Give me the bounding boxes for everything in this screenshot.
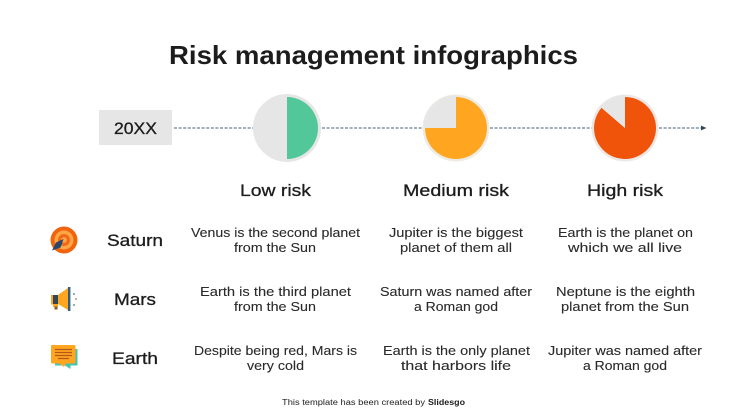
- text: Mars medium risk: [380, 285, 532, 314]
- text: Mars high risk: planet from the Sun: [561, 300, 689, 314]
- text: Saturn low risk: [191, 226, 361, 255]
- icon: megaphone: [51, 287, 77, 311]
- text: Saturn low risk: Venus is the second planet: [191, 226, 361, 240]
- text: Earth high risk: [548, 344, 702, 373]
- text: Earth high risk: a Roman god: [583, 359, 667, 373]
- text: Saturn medium risk: planet of them all: [400, 241, 512, 255]
- footer credit: Slidesgo: [428, 398, 465, 407]
- footer credit: This template has been created by: [282, 398, 425, 407]
- text: Saturn high risk: which we all live: [567, 241, 682, 255]
- text: Mars medium risk: a Roman god: [414, 300, 498, 314]
- pie: low risk: [253, 94, 321, 162]
- text: Saturn high risk: Earth is the planet on: [558, 226, 693, 240]
- icon: chat bubble: [51, 345, 78, 369]
- column heading: medium risk: Medium risk: [403, 181, 510, 200]
- text: Earth medium risk: [383, 344, 531, 373]
- pie: medium risk: [422, 94, 490, 162]
- text: Earth high risk: Jupiter was named after: [548, 344, 702, 358]
- text: Saturn high risk: [558, 226, 693, 255]
- timeline dashed arrow: [174, 126, 706, 130]
- pie: high risk: [592, 94, 658, 162]
- text: Earth low risk: very cold: [247, 359, 304, 373]
- title: Risk management infographics: [169, 40, 578, 70]
- column heading: low risk: Low risk: [240, 181, 312, 200]
- row label: Saturn: Saturn: [107, 231, 163, 250]
- text: Mars high risk: Neptune is the eighth: [556, 285, 695, 299]
- text: Earth medium risk: Earth is the only planet: [383, 344, 531, 358]
- column heading: high risk: High risk: [587, 181, 664, 200]
- text: Mars low risk: from the Sun: [234, 300, 316, 314]
- icon: target: [50, 226, 78, 254]
- text: Mars medium risk: Saturn was named after: [380, 285, 532, 299]
- text: Mars low risk: [200, 285, 352, 314]
- text: Earth medium risk: that harbors life: [401, 359, 511, 373]
- row label: Mars: Mars: [114, 290, 156, 309]
- year label box: [99, 110, 172, 145]
- text: Saturn medium risk: Jupiter is the biggest: [389, 226, 524, 240]
- text: Earth low risk: [194, 344, 357, 373]
- year label box: 20XX: [114, 119, 157, 138]
- text: Mars low risk: Earth is the third planet: [200, 285, 352, 299]
- text: Saturn medium risk: [389, 226, 524, 255]
- text: Saturn low risk: from the Sun: [234, 241, 316, 255]
- text: Earth low risk: Despite being red, Mars is: [194, 344, 357, 358]
- footer credit: [282, 398, 465, 407]
- row label: Earth: Earth: [112, 349, 158, 368]
- text: Mars high risk: [556, 285, 695, 314]
